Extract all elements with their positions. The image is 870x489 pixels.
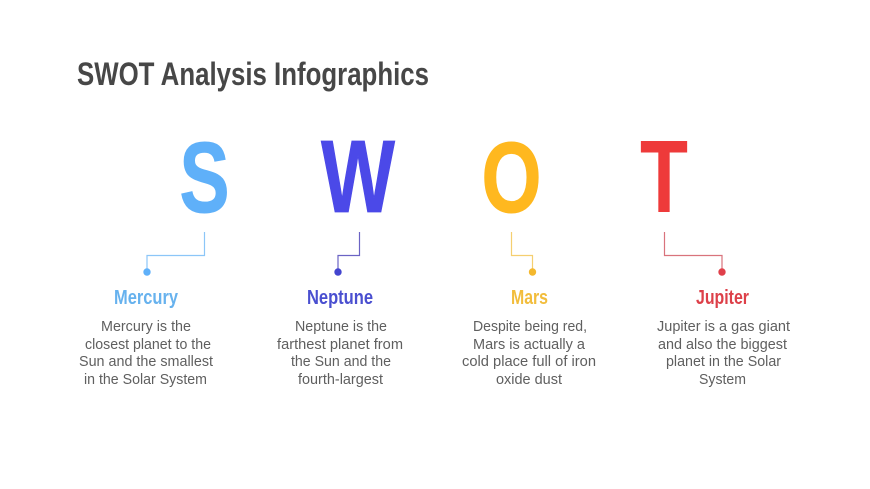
text: Mars description: Mars is actually a (473, 337, 585, 353)
text: Jupiter description: and also the biggest (658, 337, 787, 353)
text: Jupiter description: System (699, 372, 746, 388)
text: Neptune description: the Sun and the (291, 354, 391, 370)
text: Mars description: Despite being red, (473, 319, 587, 335)
text: Mercury description: in the Solar System (84, 372, 207, 388)
text: Neptune description: farthest planet from (277, 337, 403, 353)
text: Jupiter description (657, 319, 790, 388)
heading: Neptune: Neptune (307, 287, 373, 309)
heading: Jupiter: Jupiter (696, 287, 749, 309)
text: Neptune description: Neptune is the (295, 319, 387, 335)
heading: Mercury: Mercury (114, 287, 179, 309)
text: Mars description: cold place full of iron (462, 354, 596, 370)
letter W: W (321, 119, 396, 234)
text: Jupiter description: planet in the Solar (666, 354, 781, 370)
text: Mercury description: closest planet to the (85, 337, 211, 353)
connector: T to Jupiter (664, 232, 726, 276)
text: Mars description (462, 319, 596, 388)
text: Mercury description: Sun and the smallest (79, 354, 213, 370)
letter O: O (482, 122, 542, 234)
letter T: T (640, 119, 688, 234)
text: Neptune description (277, 319, 403, 388)
panel: Strengths / Mercury (79, 122, 230, 388)
panel: Opportunities / Mars (462, 122, 596, 388)
connector: S to Mercury (143, 232, 204, 276)
text: Jupiter description: Jupiter is a gas giant (657, 319, 790, 335)
text: Mercury description (79, 319, 213, 388)
panel: Weaknesses / Neptune (277, 119, 403, 388)
title: SWOT Analysis Infographics (77, 56, 429, 92)
text: Mercury description: Mercury is the (101, 319, 191, 335)
text: Mars description: oxide dust (496, 372, 562, 388)
connector: O to Mars (512, 232, 536, 276)
heading: Mars: Mars (511, 287, 548, 309)
panel: Threats / Jupiter (640, 119, 790, 388)
connector: W to Neptune (334, 232, 360, 276)
text: Neptune description: fourth-largest (298, 372, 383, 388)
letter S: S (180, 122, 230, 234)
